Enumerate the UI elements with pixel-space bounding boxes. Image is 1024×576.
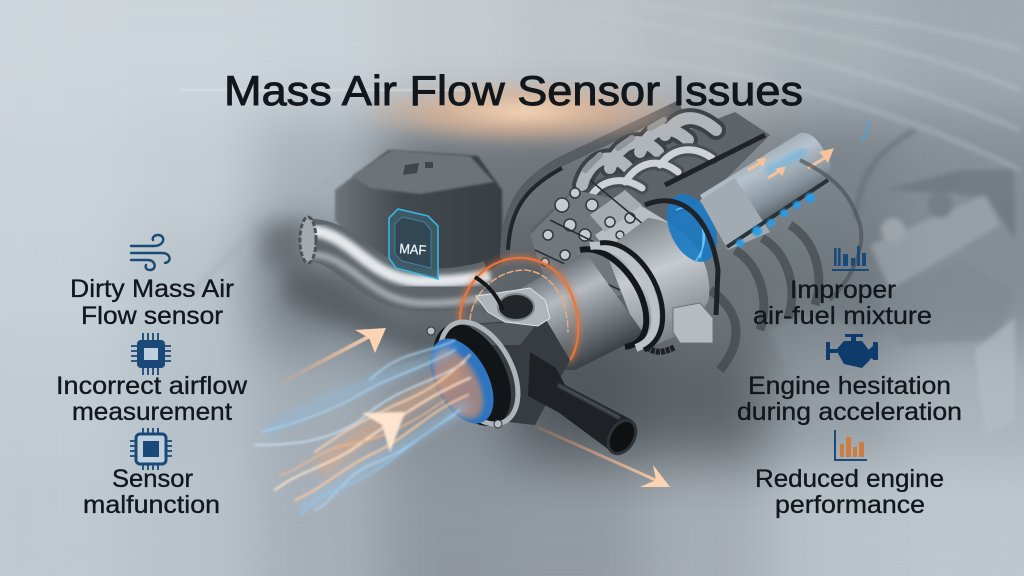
text: dirty mass air flow sensor: Flow sensor bbox=[81, 302, 223, 330]
icon: sensor chip bbox=[130, 428, 172, 470]
title: Mass Air Flow Sensor Issues bbox=[224, 67, 803, 114]
text: reduced engine performance: performance bbox=[775, 491, 925, 519]
air flow streaks bbox=[255, 340, 470, 515]
text: improper air-fuel mixture: air-fuel mixture bbox=[753, 302, 932, 330]
text: sensor malfunction: malfunction bbox=[83, 491, 220, 519]
icon: engine bbox=[826, 334, 878, 368]
text: improper air-fuel mixture bbox=[753, 276, 932, 330]
small orange arrows on intake bbox=[748, 149, 833, 178]
text: engine hesitation during acceleration: during acceleration bbox=[737, 398, 962, 426]
text: engine hesitation during acceleration: Engine hesitation bbox=[748, 372, 951, 400]
text: sensor malfunction: Sensor bbox=[112, 465, 193, 493]
hood streaks top right bbox=[480, 5, 1020, 170]
top flange with hole bbox=[475, 277, 550, 326]
chrome intake pipe bbox=[300, 217, 490, 303]
text: reduced engine performance bbox=[755, 465, 944, 519]
side black connector bbox=[528, 352, 641, 459]
icon: bar chart bbox=[832, 246, 869, 271]
dim right engine parts bbox=[770, 130, 1015, 435]
engine assembly bbox=[505, 105, 870, 370]
MAF holographic badge bbox=[389, 209, 438, 279]
arrow: central inflow bbox=[362, 412, 405, 452]
intake cylinder bbox=[700, 133, 832, 245]
blue glowing band bbox=[657, 186, 727, 270]
silver bolts block bbox=[530, 180, 668, 305]
text: improper air-fuel mixture: Improper bbox=[790, 276, 896, 304]
MAF sensor body bbox=[417, 277, 641, 459]
MAF label: MAF bbox=[399, 241, 427, 258]
text: reduced engine performance: Reduced engine bbox=[755, 465, 944, 493]
panel: effects bbox=[737, 246, 962, 519]
lower manifolds bbox=[710, 225, 819, 370]
arrow: lower right outflow bbox=[537, 427, 670, 487]
text: incorrect airflow measurement: measurement bbox=[72, 398, 232, 426]
black wrap hoses bbox=[645, 201, 718, 315]
text: dirty mass air flow sensor bbox=[70, 275, 234, 330]
panel: causes bbox=[56, 235, 248, 519]
throttle body bbox=[605, 218, 709, 345]
blue LED strip bbox=[736, 193, 815, 247]
text: incorrect airflow measurement bbox=[56, 372, 248, 426]
arrow: upper left inflow bbox=[273, 328, 386, 387]
engine silver mass bbox=[530, 112, 770, 300]
main sensor cylinder bbox=[500, 243, 663, 370]
orange glow ring bbox=[460, 258, 578, 360]
text: dirty mass air flow sensor: Dirty Mass Air bbox=[70, 275, 234, 303]
lower wiring block bbox=[640, 340, 675, 352]
text: sensor malfunction bbox=[83, 465, 220, 519]
dark band under chrome pipe bbox=[262, 218, 500, 372]
intake manifold runners bbox=[582, 118, 716, 198]
air filter box bbox=[190, 150, 502, 295]
icon: orange bar chart bbox=[835, 430, 867, 460]
black coolant hose bbox=[505, 105, 680, 258]
text: incorrect airflow measurement: Incorrect airflow bbox=[56, 372, 248, 400]
icon: circuit chip bbox=[131, 333, 171, 375]
icon: wind bbox=[131, 235, 170, 270]
title glow bbox=[180, 78, 695, 146]
front clamp ring bbox=[417, 309, 534, 439]
text: engine hesitation during acceleration bbox=[737, 372, 962, 426]
